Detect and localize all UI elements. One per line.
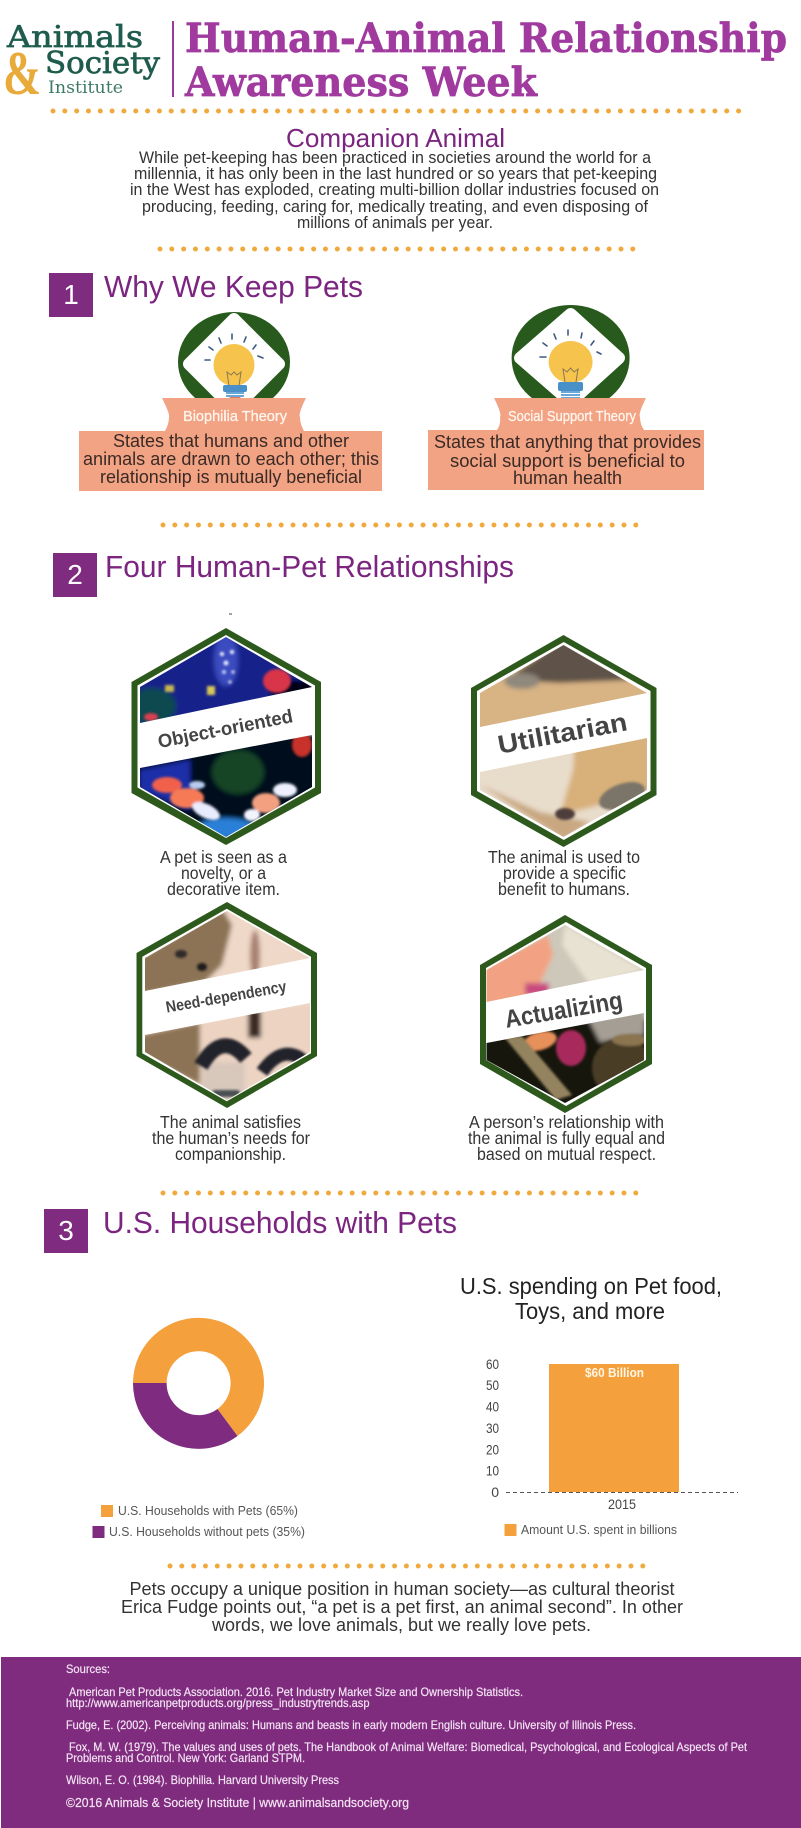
intro text block (130, 149, 659, 232)
caption: Actualizing: A person’s relationship with (469, 1112, 664, 1132)
bar chart: 10 (486, 1462, 499, 1478)
section 3 number badge (44, 1209, 88, 1253)
caption: Utilitarian: benefit to humans. (498, 879, 630, 899)
caption: Utilitarian (488, 847, 640, 899)
closing text block: Erica Fudge points out, “a pet is a pet first, an animal second”. In other (121, 1596, 683, 1617)
intro text block: millennia, it has only been in the last hundred or so years that pet-keeping (134, 165, 657, 183)
section 1 number badge: 1 (63, 279, 79, 310)
section 1 number badge (49, 273, 93, 317)
banner: Biophilia Theory: Biophilia Theory (183, 409, 288, 425)
panel: footer sources (1, 1657, 801, 1828)
donut legend: U.S. Households without pets (35%) (109, 1525, 305, 1539)
text box: Biophilia description: animals are drawn to each other; this (83, 448, 379, 469)
title (184, 15, 787, 106)
hexagon: Object-oriented: Object-oriented (156, 706, 295, 753)
intro text block: millions of animals per year. (297, 214, 493, 232)
bar chart: 20 (486, 1442, 499, 1458)
section 2 number badge: 2 (67, 559, 83, 590)
caption: Utilitarian: provide a specific (503, 863, 626, 883)
caption: Object-oriented: novelty, or a (181, 863, 266, 883)
caption: Need-dependency: The animal satisfies (160, 1112, 301, 1132)
icon: light bulb in green badge (512, 305, 630, 411)
bar chart: 2015 (608, 1496, 636, 1512)
hexagon: Object-oriented (128, 628, 321, 845)
text box: Social Support description: social support is beneficial to (450, 450, 685, 471)
section 3 heading: U.S. Households with Pets (103, 1205, 457, 1240)
intro text block: While pet-keeping has been practiced in societies around the world for a (139, 149, 652, 167)
caption: Object-oriented: decorative item. (167, 879, 280, 899)
text box: Biophilia description: relationship is mutually beneficial (100, 466, 362, 487)
bar chart title: Toys, and more (515, 1298, 665, 1324)
closing text block: Pets occupy a unique position in human society—as cultural theorist (130, 1578, 674, 1599)
caption: Need-dependency: the human’s needs for (152, 1128, 310, 1148)
panel: footer sources: American Pet Products Association. 2016. Pet Industry Market Size and Ownership Statistics. (69, 1685, 523, 1699)
hexagon: Actualizing (480, 915, 652, 1113)
intro text block: in the West has exploded, creating multi-billion dollar industries focused on (130, 181, 659, 199)
caption: Actualizing (468, 1112, 665, 1164)
caption: Utilitarian: The animal is used to (488, 847, 640, 867)
heading: Companion Animal: Companion Animal (286, 123, 505, 153)
bar chart: $60 Billion (585, 1366, 644, 1380)
closing text block (121, 1578, 683, 1635)
panel: footer sources: Fox, M. W. (1979). The values and uses of pets. The Handbook of Animal Welfare: Biomedical, Psychological, and Ecological Aspects of Pet (69, 1740, 748, 1754)
bar chart title: U.S. spending on Pet food, (460, 1273, 722, 1299)
panel: footer sources: Sources: (66, 1662, 110, 1676)
donut legend: U.S. Households with Pets (65%) (118, 1504, 298, 1518)
text box: Social Support description: States that anything that provides (434, 431, 701, 452)
banner: Biophilia Theory (162, 398, 306, 431)
caption: Actualizing: based on mutual respect. (477, 1144, 656, 1164)
hexagon: Actualizing: Actualizing (503, 986, 625, 1034)
panel: footer sources: Problems and Control. New York: Garland STPM. (66, 1751, 305, 1765)
section 3 number badge: 3 (58, 1215, 74, 1246)
closing text block: words, we love animals, but we really love pets. (211, 1614, 591, 1635)
section 2 number badge (53, 553, 97, 597)
text box: Biophilia description (79, 430, 382, 491)
hexagon: Utilitarian: Utilitarian (495, 706, 629, 760)
caption: Object-oriented: A pet is seen as a (160, 847, 287, 867)
panel: footer sources: ©2016 Animals & Society Institute | www.animalsandsociety.org (66, 1795, 409, 1810)
bar chart: 40 (486, 1398, 499, 1414)
logo: Animals & Society Institute: & (3, 40, 41, 108)
bar chart legend: Amount U.S. spent in billions (521, 1523, 677, 1537)
section 2 heading: Four Human-Pet Relationships (105, 549, 514, 584)
text box: Biophilia description: States that humans and other (113, 430, 349, 451)
intro text block: producing, feeding, caring for, medically treating, and even disposing of (142, 198, 648, 216)
caption: Actualizing: the animal is fully equal and (468, 1128, 665, 1148)
bar chart title (460, 1273, 722, 1324)
panel: Social Support Theory (428, 305, 704, 490)
banner: Social Support Theory (494, 398, 646, 430)
banner: Social Support Theory: Social Support Theory (508, 409, 637, 425)
text box: Social Support description: human health (513, 467, 622, 488)
logo: Animals & Society Institute: Animals (6, 20, 143, 55)
hexagon: Need-dependency: Need-dependency (165, 979, 288, 1017)
title: Awareness Week (184, 59, 538, 106)
panel: footer sources: Fudge, E. (2002). Perceiving animals: Humans and beasts in early modern English culture. University of Illinois Press. (66, 1718, 636, 1732)
caption: Need-dependency (152, 1112, 310, 1164)
caption: Need-dependency: companionship. (175, 1144, 286, 1164)
logo: Animals & Society Institute: Society (45, 46, 160, 81)
text box: Social Support description (428, 430, 704, 490)
donut chart (133, 1318, 264, 1449)
icon: light bulb in green badge (178, 312, 290, 412)
bar chart (486, 1356, 738, 1512)
caption: Object-oriented (160, 847, 287, 899)
bar chart: 30 (486, 1420, 499, 1436)
logo: Animals & Society Institute: Institute (48, 78, 123, 98)
panel: footer sources: Wilson, E. O. (1984). Biophilia. Harvard University Press (66, 1773, 339, 1787)
bar chart: 60 (486, 1356, 499, 1372)
section 1 heading: Why We Keep Pets (104, 269, 363, 304)
bar chart: 50 (486, 1377, 499, 1393)
panel: footer sources: http://www.americanpetproducts.org/press_industrytrends.asp (66, 1696, 370, 1710)
header divider (172, 21, 174, 97)
panel: Biophilia Theory (79, 312, 382, 491)
bar chart: 0 (491, 1484, 499, 1500)
hexagon: Need-dependency (135, 902, 320, 1108)
logo: Animals & Society Institute (3, 20, 160, 108)
donut legend (92, 1504, 305, 1539)
hexagon: Utilitarian (470, 635, 660, 847)
